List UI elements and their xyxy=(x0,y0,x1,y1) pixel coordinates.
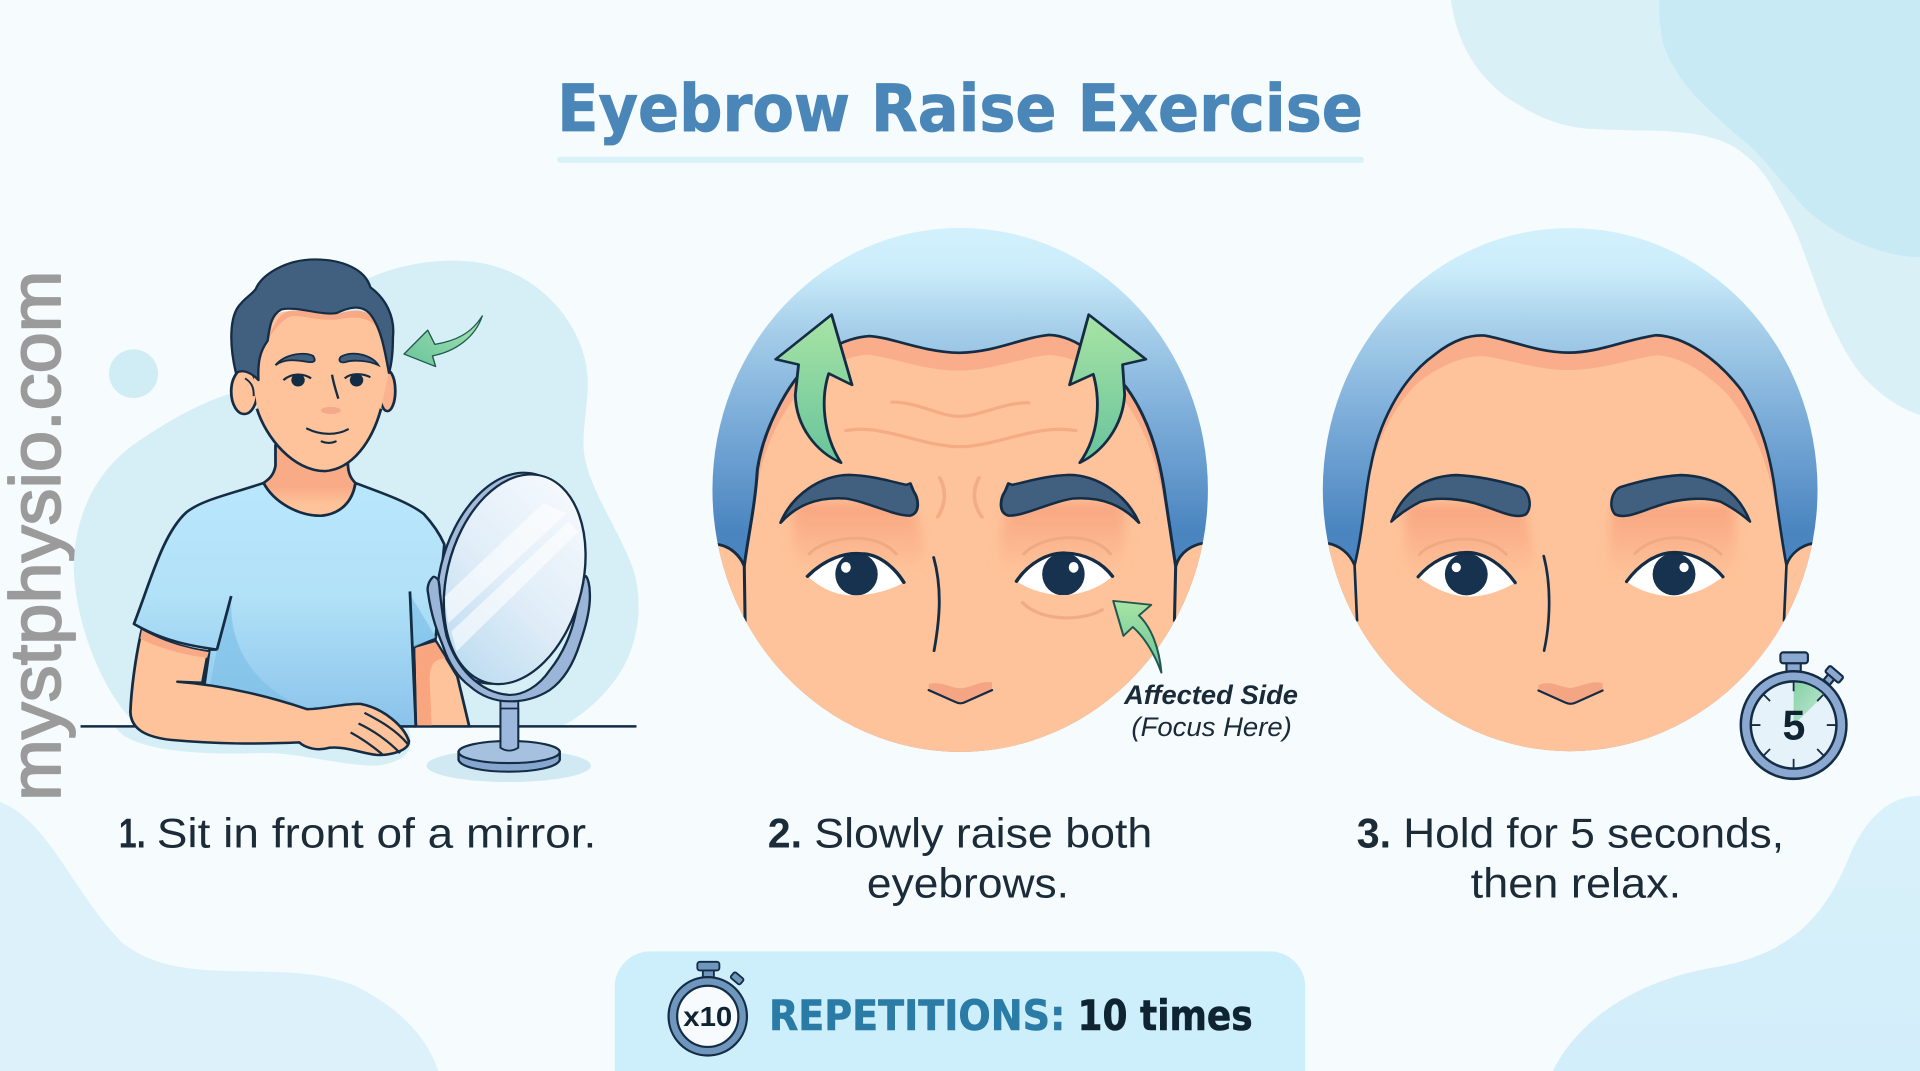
under eye line xyxy=(1023,603,1102,618)
nose base xyxy=(1538,682,1603,705)
elapsed wedge xyxy=(1794,683,1824,725)
table shadow xyxy=(115,727,411,766)
mirror reflection xyxy=(445,503,578,651)
nose shade xyxy=(321,407,341,414)
neck lines xyxy=(264,444,355,516)
eye left xyxy=(1418,552,1515,596)
mirror shadow xyxy=(427,749,591,782)
title underline xyxy=(557,157,1364,163)
panel: step 3 relaxed face xyxy=(1310,228,1846,779)
green arrow to eyebrow xyxy=(404,316,482,367)
ear left xyxy=(231,369,257,414)
eyebrows xyxy=(781,475,1139,523)
panel: step 1 illustration, man at mirror xyxy=(74,259,639,782)
hair background xyxy=(1310,228,1828,751)
eye shading xyxy=(1609,501,1736,558)
face xyxy=(254,311,390,471)
mirror xyxy=(426,472,592,773)
head circle xyxy=(1310,228,1828,765)
hairline outline xyxy=(744,335,1176,566)
ear right xyxy=(379,370,395,411)
far arm shadow xyxy=(416,642,446,725)
sleeve shadow xyxy=(140,630,209,658)
skin light xyxy=(718,355,1203,752)
hair xyxy=(231,259,393,380)
fingers xyxy=(351,713,408,754)
neck xyxy=(264,444,355,516)
shirt fold lines xyxy=(217,591,416,726)
mirror base edge xyxy=(459,752,560,772)
pupils xyxy=(291,374,363,387)
stopwatch side button xyxy=(1820,665,1844,689)
skin light xyxy=(1310,355,1828,765)
mirror stand arc xyxy=(428,576,590,701)
mirror glass xyxy=(424,462,606,696)
seconds number: 5 xyxy=(1783,702,1805,749)
mouth xyxy=(307,429,348,443)
dial ticks xyxy=(1751,682,1836,768)
title: Eyebrow Raise Exercise xyxy=(557,72,1363,147)
shirt shading xyxy=(210,594,436,709)
background blob xyxy=(74,261,639,726)
affected side label xyxy=(1123,680,1298,742)
post lower xyxy=(500,709,518,751)
repetitions value: 10 times xyxy=(1078,991,1253,1040)
eye left xyxy=(808,553,904,596)
affected side arrow xyxy=(1113,601,1161,673)
small circle xyxy=(109,349,158,398)
nose xyxy=(332,375,338,399)
table line xyxy=(81,723,636,730)
nose line xyxy=(1538,691,1603,704)
step 3 caption: 3. xyxy=(1357,809,1391,856)
repetitions stopwatch icon xyxy=(669,962,747,1056)
step 2 caption: 2. xyxy=(768,809,802,856)
ears xyxy=(1328,543,1813,621)
step 3 caption: then relax. xyxy=(1471,860,1681,907)
ears xyxy=(714,543,1204,622)
step 3 caption xyxy=(1357,809,1784,907)
mirror base top xyxy=(459,741,560,763)
nose xyxy=(934,557,939,651)
step 2 caption: eyebrows. xyxy=(867,860,1069,907)
eye shading xyxy=(791,500,921,552)
eye right xyxy=(1016,553,1112,596)
step 3 caption: Hold for 5 seconds, xyxy=(1403,809,1784,856)
panel: step 2 face with raised eyebrows xyxy=(712,228,1208,752)
stopwatch xyxy=(1741,652,1846,779)
stopwatch ring xyxy=(1741,671,1846,779)
jaw line xyxy=(257,409,381,471)
panel: repetitions bar xyxy=(615,951,1305,1071)
nose line xyxy=(929,690,992,703)
eyelid creases xyxy=(1420,538,1721,554)
step 1 caption: Sit in front of a mirror. xyxy=(157,809,596,856)
mirror post xyxy=(500,698,518,752)
mirror frame xyxy=(416,461,599,696)
eyebrows xyxy=(1391,475,1750,522)
skin base xyxy=(1310,335,1828,765)
eye right xyxy=(1627,552,1723,596)
far arm xyxy=(414,641,469,726)
eyes xyxy=(283,374,370,380)
stopwatch stem xyxy=(1786,661,1801,674)
ear left inner line xyxy=(245,378,254,396)
right up arrow xyxy=(1070,315,1146,463)
step 2 caption: Slowly raise both xyxy=(814,809,1152,856)
affected side label: (Focus Here) xyxy=(1131,712,1292,742)
eyelid creases xyxy=(809,538,1110,554)
bar background xyxy=(615,951,1305,1071)
repetitions label: REPETITIONS: xyxy=(769,991,1065,1040)
eyebrows xyxy=(275,354,378,365)
left up arrow xyxy=(776,315,852,463)
stopwatch dial xyxy=(1751,681,1836,769)
hairline outline xyxy=(1355,335,1786,565)
nose base xyxy=(929,682,992,704)
eye shading xyxy=(1002,500,1126,552)
times ten label: x10 xyxy=(683,1001,732,1032)
skin base xyxy=(718,336,1203,752)
head circle xyxy=(712,228,1208,752)
step 1 caption: 1. xyxy=(119,809,146,856)
step 2 caption xyxy=(768,809,1152,907)
affected side label: Affected Side xyxy=(1123,680,1298,710)
hair background xyxy=(690,228,1221,752)
forehead wrinkles xyxy=(846,402,1076,517)
eye shading xyxy=(1403,501,1531,558)
nose xyxy=(1544,556,1549,651)
torso xyxy=(134,483,444,726)
near arm xyxy=(130,629,409,755)
hairline shadow xyxy=(270,311,376,337)
stopwatch top button xyxy=(1780,652,1808,663)
